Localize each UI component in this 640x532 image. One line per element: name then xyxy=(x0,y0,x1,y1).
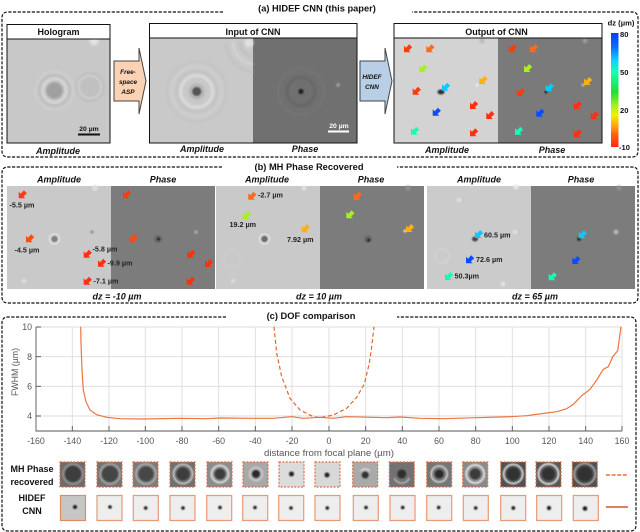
x axis labels: -100 xyxy=(136,436,154,446)
y axis labels: 4 xyxy=(27,411,32,421)
colorbar: dz: 20 xyxy=(620,106,628,115)
group: dz = 10: 7.92 µm xyxy=(287,235,314,244)
legend: dashed line xyxy=(606,474,628,476)
group: dz = 10: Amplitude xyxy=(244,174,289,184)
input of CNN image panel: Phase xyxy=(292,144,318,154)
x axis labels: 40 xyxy=(397,436,407,446)
group: dz = 65: 60.5 µm xyxy=(484,230,511,240)
group: dz = -10: Phase xyxy=(150,174,176,184)
arrows: amplitude xyxy=(243,192,310,232)
heading: panel c: (c) DOF comparison xyxy=(267,311,356,321)
output of CNN image panel xyxy=(394,24,602,155)
y axis labels: 10 xyxy=(22,322,32,332)
x axis labels: -140 xyxy=(63,436,81,446)
x axis labels xyxy=(27,436,629,446)
row label: HIDEF CNN xyxy=(18,493,46,516)
input of CNN image panel: Amplitude xyxy=(179,144,224,154)
x axis labels: 60 xyxy=(434,436,444,446)
group: dz = -10 xyxy=(7,174,215,302)
arrows: output amplitude xyxy=(404,44,494,136)
panel: (b) MH Phase Recovered xyxy=(2,162,638,303)
x axis labels: -60 xyxy=(212,436,225,446)
output of CNN image panel: Output of CNN xyxy=(465,27,528,37)
group: dz = 65: Phase xyxy=(568,174,594,184)
group: dz = 10 xyxy=(216,174,424,302)
x axis labels: -20 xyxy=(286,436,298,446)
x axis labels: -120 xyxy=(100,436,118,446)
group: dz = -10: Amplitude xyxy=(36,174,81,184)
output of CNN image panel: Amplitude xyxy=(424,145,469,155)
row label: MH Phase recovered xyxy=(10,464,54,487)
group: dz = -10: -5.5 µm xyxy=(10,200,34,210)
group: dz = 65: Amplitude xyxy=(456,174,501,184)
line chart: FWHM vs distance xyxy=(10,322,629,458)
hologram image panel: 20 µm xyxy=(79,126,99,133)
x axis labels: 20 xyxy=(361,436,371,446)
heading: panel b: (b) MH Phase Recovered xyxy=(254,162,364,172)
group: dz = 10: 19.2 µm xyxy=(230,220,256,229)
group: dz = 10: -2.7 µm xyxy=(258,190,283,200)
colorbar: dz: 50 xyxy=(620,68,628,77)
group: dz = -10: -4.5 µm xyxy=(14,246,39,254)
input of CNN image panel xyxy=(149,24,357,154)
arrow: free-space ASP: space xyxy=(119,79,138,86)
group: dz = 65: dz = 65 µm xyxy=(512,292,558,302)
panel: (c) DOF comparison xyxy=(2,311,636,531)
arrow: free-space ASP xyxy=(114,48,146,114)
x axis labels: 100 xyxy=(505,436,520,446)
x axis labels: 0 xyxy=(327,436,332,446)
line chart: FWHM vs distance: FWHM (µm) xyxy=(10,348,20,396)
hologram image panel: Amplitude xyxy=(35,146,80,156)
thumbnails: HIDEF CNN xyxy=(60,496,598,520)
axes xyxy=(36,327,622,431)
arrow: HIDEF CNN: HIDEF xyxy=(362,74,383,81)
arrows: phase xyxy=(123,190,213,285)
group: dz = -10: -5.8 µm xyxy=(92,244,117,254)
input of CNN image panel: Input of CNN xyxy=(226,27,280,37)
x axis labels: 160 xyxy=(615,436,629,446)
group: dz = 65: 72.6 µm xyxy=(476,255,503,264)
colorbar: dz xyxy=(608,18,635,152)
curve: HIDEF CNN (solid) xyxy=(81,327,621,419)
line chart: FWHM vs distance: distance from focal plane (µm) xyxy=(264,448,394,458)
y axis labels: 6 xyxy=(27,382,32,392)
arrows: phase xyxy=(549,230,587,280)
output of CNN image panel: Phase xyxy=(539,145,565,155)
heading: panel a: (a) HIDEF CNN (this paper) xyxy=(258,4,376,14)
group: dz = 65: 50.3µm xyxy=(454,272,479,280)
panel: (a) HIDEF CNN xyxy=(2,4,638,157)
group: dz = 10: dz = 10 µm xyxy=(296,292,342,302)
arrows: amplitude xyxy=(445,230,483,280)
arrow: free-space ASP: Free- xyxy=(120,69,136,76)
group: dz = -10: dz = -10 µm xyxy=(93,292,141,302)
x axis labels: 120 xyxy=(542,436,556,446)
y axis labels xyxy=(22,322,32,421)
x axis labels: 80 xyxy=(471,436,481,446)
thumbnails: MH phase recovered xyxy=(60,462,597,487)
row label: HIDEF CNN: HIDEF xyxy=(18,493,46,503)
x axis labels: -40 xyxy=(249,436,262,446)
arrows: output phase xyxy=(509,44,599,137)
legend: solid line xyxy=(606,506,628,508)
input of CNN image panel: 20 µm xyxy=(329,123,349,130)
group: dz = 65 xyxy=(427,174,635,302)
colorbar: dz: 80 xyxy=(620,30,628,39)
x axis labels: -80 xyxy=(176,436,188,446)
colorbar: dz: -10 xyxy=(619,143,630,152)
arrows: amplitude xyxy=(19,190,106,285)
x axis labels: 140 xyxy=(578,436,593,446)
arrows: phase xyxy=(346,192,414,232)
arrow: free-space ASP: ASP xyxy=(120,89,135,96)
colorbar: dz: dz (µm) xyxy=(608,18,635,28)
x axis labels: -160 xyxy=(27,436,45,446)
group: dz = -10: -7.1 µm xyxy=(94,276,118,286)
row label: MH Phase recovered: MH Phase xyxy=(10,464,54,474)
hologram image panel xyxy=(7,24,110,156)
curve: MH phase recovered (dashed) xyxy=(274,327,374,418)
hologram image panel: Hologram xyxy=(37,27,80,37)
group: dz = 10: Phase xyxy=(358,174,384,184)
row label: MH Phase recovered: recovered xyxy=(10,477,54,487)
arrow: HIDEF CNN xyxy=(360,48,392,114)
group: dz = -10: -9.9 µm xyxy=(108,258,132,268)
arrow: HIDEF CNN: CNN xyxy=(365,84,379,91)
y axis labels: 8 xyxy=(27,352,32,362)
row label: HIDEF CNN: CNN xyxy=(22,506,42,516)
